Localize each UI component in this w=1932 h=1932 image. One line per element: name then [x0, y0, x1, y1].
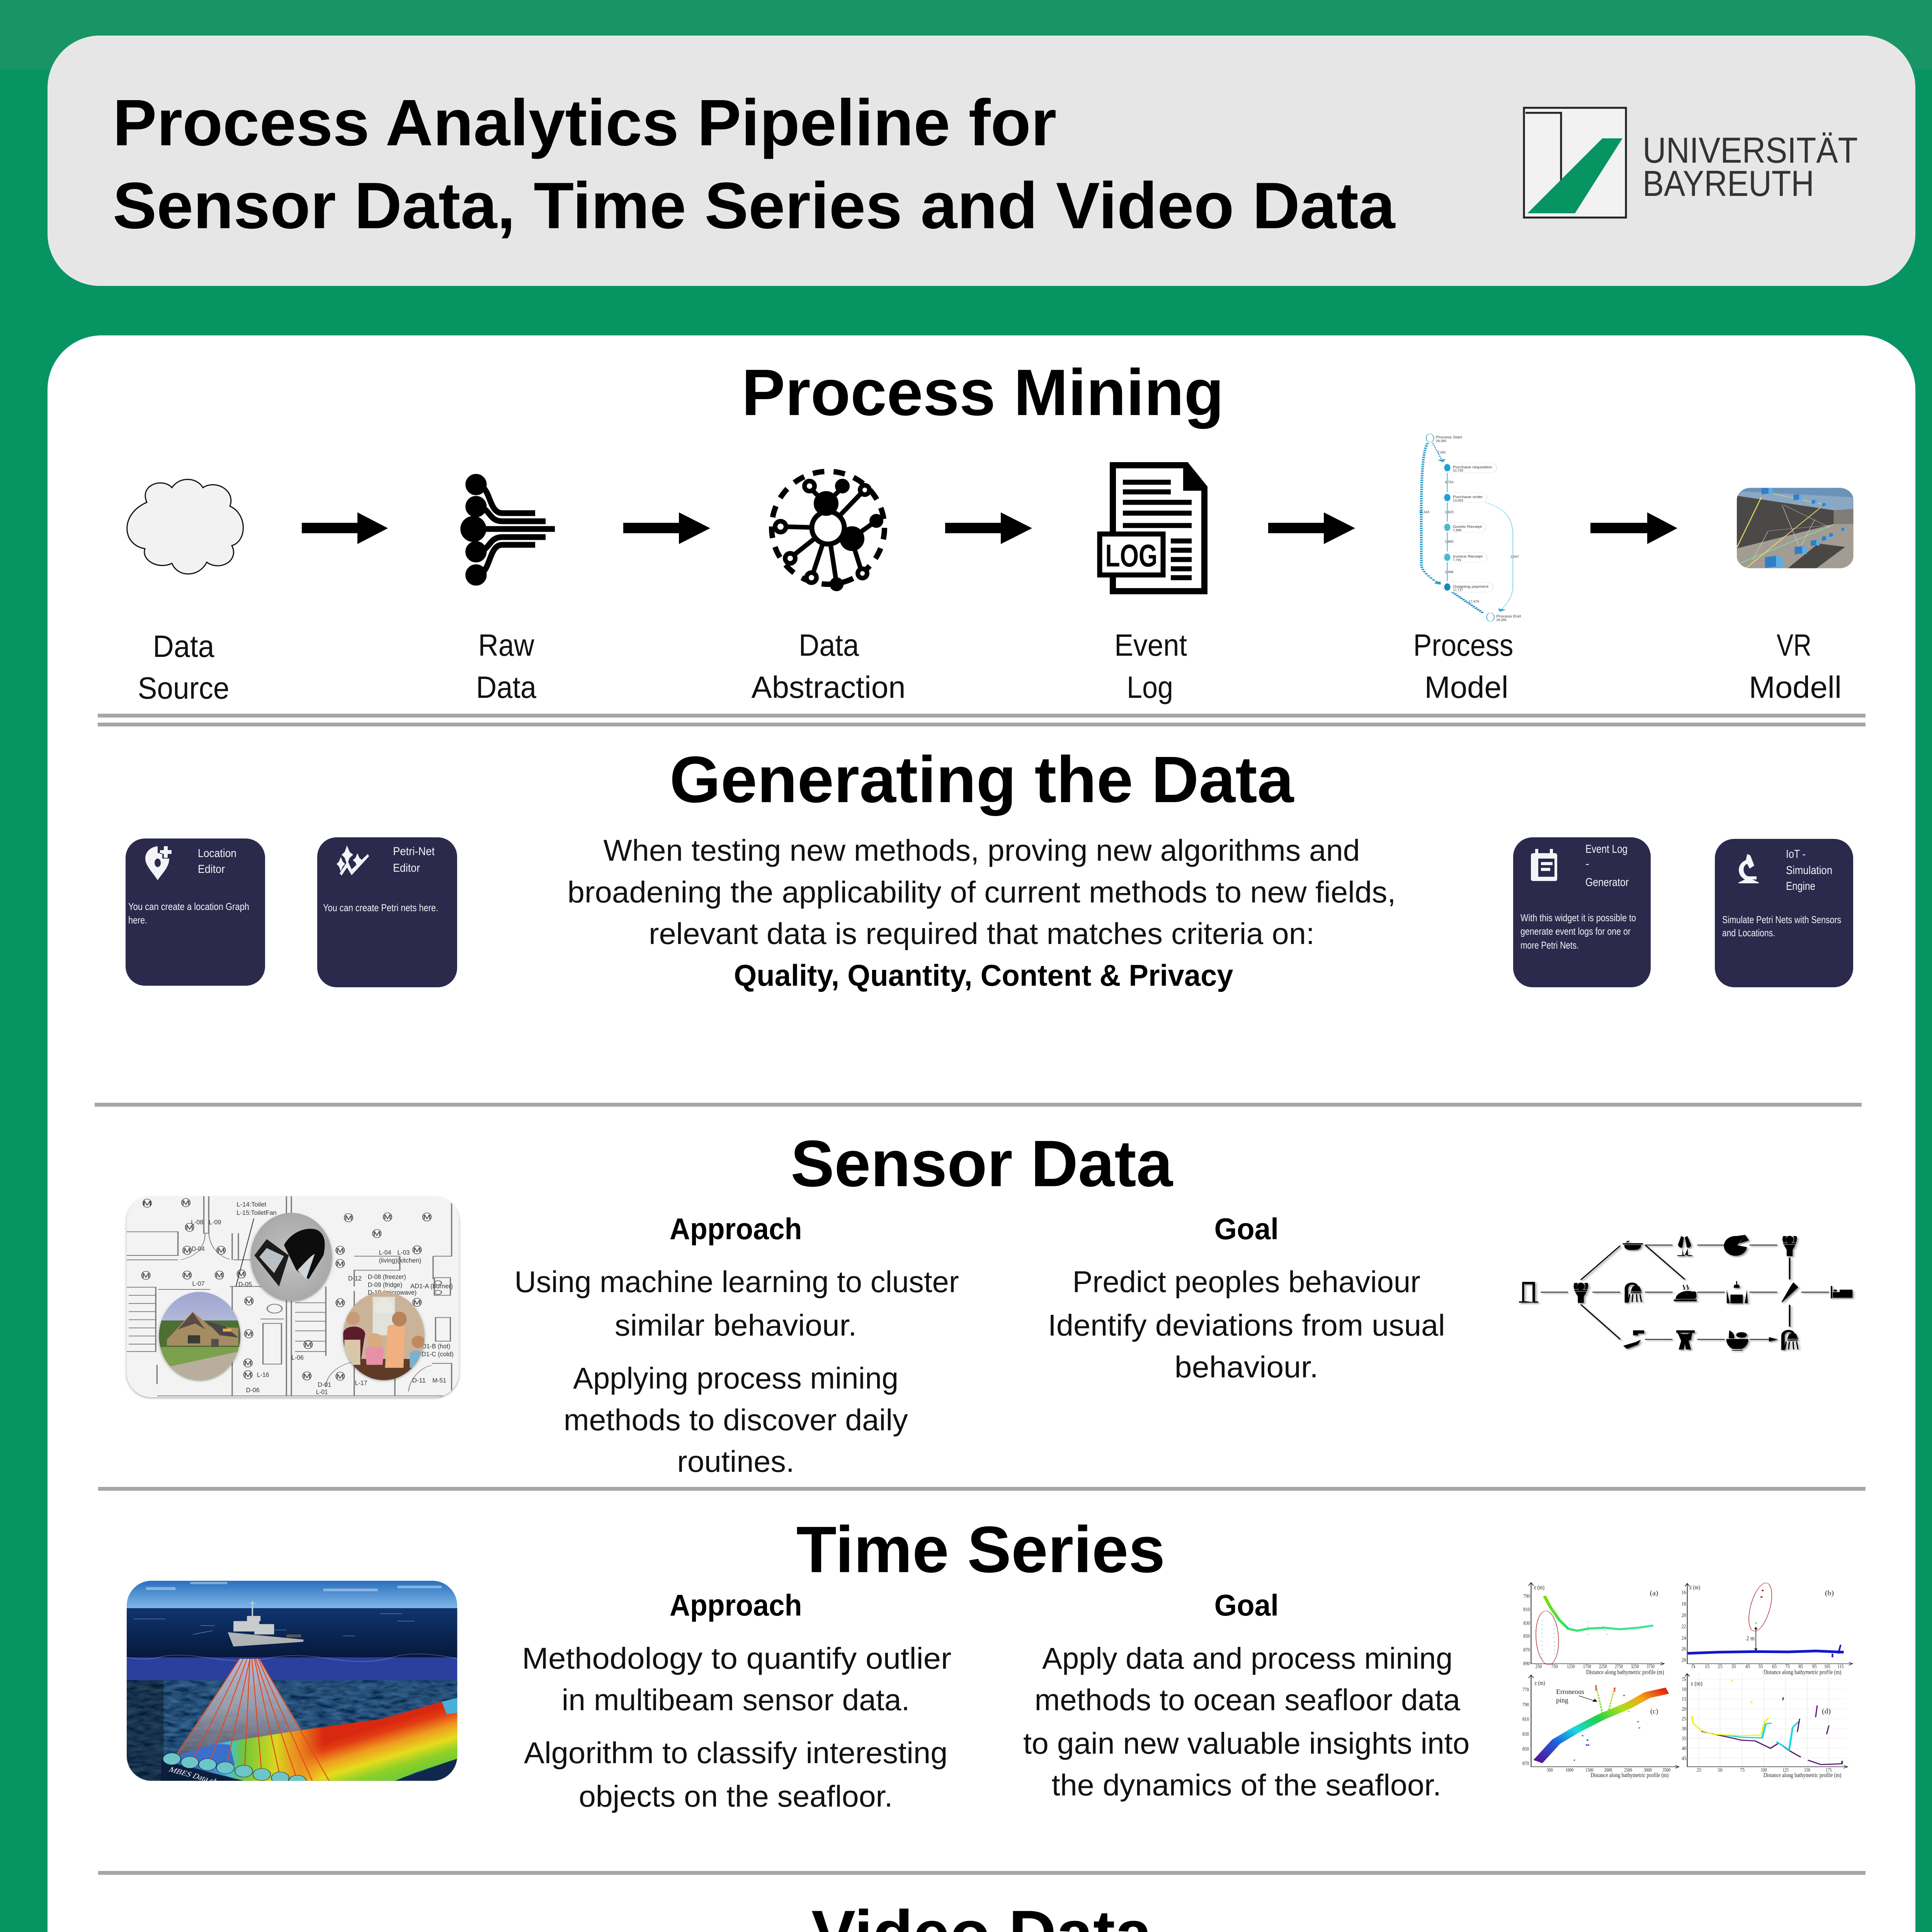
process model diagram: Purchase order: [1453, 495, 1483, 499]
process model diagram: 7,791: [1453, 558, 1461, 562]
chart (a): 810: [1523, 1606, 1530, 1612]
image: smart home floor plan: M: [413, 1299, 421, 1306]
process model diagram: 7,999: [1453, 529, 1461, 532]
inset photo: family: [343, 1292, 425, 1381]
image: smart home floor plan: AD1-A (burner): [410, 1282, 453, 1290]
image: smart home floor plan: M: [413, 1247, 421, 1253]
heading: Generating the Data: Generating the Data: [670, 743, 1294, 816]
card: Petri-Net Editor: Editor: [393, 862, 420, 874]
image: smart home floor plan: D-12: [348, 1275, 362, 1282]
card: Location Editor: You can create a location Graph: [128, 901, 249, 912]
VR model image: [1737, 487, 1854, 568]
chart (a): 2250: [1599, 1663, 1607, 1669]
text: sensor data goal: [1048, 1212, 1445, 1384]
diagram: daily routine flow: [1519, 1235, 1852, 1351]
image: smart home floor plan: M: [182, 1199, 190, 1206]
process model diagram: 1,468: [1445, 570, 1454, 574]
title: Sensor Data, Time Series and Video Data: [113, 168, 1396, 242]
text: time series goal: Apply data and process mining: [1042, 1641, 1452, 1675]
process model diagram: 29,395: [1496, 618, 1507, 622]
chart (b): 115: [1838, 1663, 1844, 1669]
chart (a): 1250: [1567, 1663, 1575, 1669]
panel: main content: [48, 335, 1915, 1932]
image: smart home floor plan: [127, 1196, 459, 1397]
image: smart home floor plan: L-07: [192, 1280, 204, 1287]
card: IoT Simulation Engine: Engine: [1786, 880, 1815, 893]
chart (c): 1000: [1565, 1767, 1573, 1773]
image: smart home floor plan: L-06: [291, 1354, 304, 1361]
text: sensor data approach: methods to discover daily: [564, 1403, 908, 1437]
text: time series approach: in multibeam sensor data.: [562, 1683, 910, 1717]
image: smart home floor plan: M: [345, 1214, 352, 1221]
process step labels: Modell: [1749, 670, 1842, 704]
icon: university logo: UNIVERSITÄT: [1643, 130, 1858, 170]
chart (b): 105: [1824, 1663, 1830, 1669]
inset photo: motion sensor: [251, 1213, 332, 1301]
card: IoT Simulation Engine: Simulate Petri Nets with Sensors: [1722, 914, 1841, 925]
arrow: [1268, 512, 1355, 544]
chart (d): 10: [1682, 1686, 1686, 1692]
text: time series goal: the dynamics of the seafloor.: [1052, 1768, 1441, 1802]
text: generating the data description: Quality, Quantity, Content & Privacy: [734, 958, 1233, 992]
text: time series approach: Methodology to quantify outlier: [522, 1641, 951, 1675]
process step labels: Data: [476, 670, 536, 704]
process model diagram: 13,059: [1453, 499, 1463, 502]
chart (c): 2500: [1624, 1767, 1632, 1773]
image: smart home floor plan: D-04: [192, 1245, 205, 1252]
title: [113, 86, 1396, 242]
image: smart home floor plan: M: [245, 1298, 253, 1304]
process model diagram: 2,007: [1510, 555, 1519, 558]
process step labels: Data: [799, 628, 859, 662]
chart (d): z (m): [1691, 1680, 1702, 1687]
chart (b): 65: [1772, 1663, 1777, 1669]
process model diagram: 1,893: [1445, 540, 1454, 543]
chart (b): 5: [1691, 1663, 1696, 1669]
icon: microscope: [1738, 854, 1759, 883]
card: Event Log Generator: -: [1585, 857, 1589, 870]
chart (d): 5: [1682, 1676, 1686, 1682]
image: smart home floor plan: M: [142, 1272, 150, 1279]
process model diagram: 7,691: [1438, 451, 1446, 454]
card: IoT Simulation Engine: [1715, 839, 1853, 987]
chart (d): (d): [1822, 1708, 1831, 1715]
chart (c): 2000: [1604, 1767, 1612, 1773]
chart (a): z (m): [1534, 1584, 1544, 1591]
card: Event Log Generator: [1513, 837, 1651, 987]
chart (d): 40: [1682, 1745, 1686, 1751]
text: generating the data description: [567, 833, 1396, 992]
card: Event Log Generator: more Petri Nets.: [1520, 939, 1579, 951]
chart (b): 35: [1731, 1663, 1736, 1669]
process step labels: Log: [1127, 670, 1173, 704]
text: sensor data goal: behaviour.: [1175, 1350, 1318, 1384]
chart (a): 790: [1523, 1593, 1530, 1599]
icon: calendar: [1531, 849, 1557, 881]
chart (b): 2 m: [1746, 1635, 1755, 1642]
image: smart home floor plan: D1-C (cold): [422, 1350, 454, 1358]
chart (c): 830: [1522, 1731, 1529, 1737]
text: time series goal: methods to ocean seafloor data: [1035, 1683, 1460, 1717]
text: sensor data approach: routines.: [677, 1444, 794, 1478]
icon: event log document: LOG: [1105, 538, 1158, 573]
process step labels: [138, 628, 1842, 705]
image: smart home floor plan: M: [304, 1341, 312, 1348]
text: sensor data approach: Approach: [670, 1212, 802, 1246]
image: smart home floor plan: L-01: [316, 1388, 328, 1396]
heading: Time Series: Time Series: [796, 1513, 1165, 1586]
chart (c): 3500: [1662, 1767, 1670, 1773]
heading: Sensor Data: Sensor Data: [791, 1127, 1173, 1200]
image: smart home floor plan: M: [337, 1247, 344, 1254]
image: smart home floor plan: M-51: [432, 1377, 446, 1384]
chart (c): 790: [1522, 1702, 1529, 1708]
image: smart home floor plan: M: [216, 1272, 223, 1279]
image: smart home floor plan: M: [337, 1373, 344, 1380]
chart (c): Erroneous: [1556, 1688, 1584, 1696]
chart (d): 25: [1697, 1767, 1701, 1773]
card: Event Log Generator: With this widget it is possible to: [1520, 912, 1636, 923]
chart (a): 890: [1523, 1660, 1530, 1666]
chart (b): 22: [1681, 1623, 1686, 1629]
title: Process Analytics Pipeline for: [113, 86, 1056, 159]
chart (d): 150: [1804, 1767, 1810, 1773]
chart (b): Distance along bathymetric profile (m): [1764, 1669, 1841, 1675]
chart (b): 24: [1681, 1635, 1686, 1641]
icon: data source cloud: [127, 480, 243, 574]
chart (b): 55: [1758, 1663, 1763, 1669]
process step labels: Event: [1114, 628, 1187, 662]
card: Location Editor: Location: [198, 847, 236, 860]
image: smart home floor plan: M: [373, 1230, 381, 1237]
chart (b): 15: [1705, 1663, 1709, 1669]
chart (c): (c): [1650, 1708, 1658, 1715]
process step labels: Source: [138, 671, 230, 705]
text: sensor data approach: [514, 1212, 959, 1478]
card: IoT Simulation Engine: and Locations.: [1722, 927, 1775, 939]
chart (c): ping: [1556, 1697, 1568, 1704]
chart (d): 175: [1826, 1767, 1832, 1773]
chart: bathymetric profiles: [1522, 1582, 1852, 1779]
text: time series goal: Goal: [1214, 1588, 1279, 1622]
chart (b): z (m): [1690, 1584, 1700, 1591]
ship: [228, 1632, 304, 1646]
process model diagram: Invoice Receipt: [1453, 554, 1483, 558]
chart (c): z (m): [1535, 1680, 1545, 1687]
chart (d): 125: [1782, 1767, 1789, 1773]
image: smart home floor plan: M: [245, 1330, 252, 1337]
image: smart home floor plan: M: [244, 1359, 252, 1367]
image: smart home floor plan: M: [303, 1372, 311, 1379]
chart (b): 16: [1681, 1589, 1686, 1595]
chart (a): 250: [1535, 1663, 1542, 1669]
chart (c): 3000: [1644, 1767, 1652, 1773]
icon: event log document: [1100, 465, 1204, 591]
text: time series goal: to gain new valuable insights into: [1023, 1726, 1469, 1760]
process model diagram: Process Start: [1436, 435, 1462, 439]
chart (c): [1522, 1675, 1679, 1779]
chart (c): 500: [1547, 1767, 1553, 1773]
chart (b): [1681, 1582, 1852, 1675]
image: smart home floor plan: D-01: [318, 1381, 331, 1388]
process model diagram: 10,728: [1453, 469, 1463, 472]
text: time series goal: [1023, 1588, 1469, 1802]
chart (d): [1682, 1673, 1848, 1779]
card: Location Editor: here.: [128, 914, 147, 926]
text: sensor data goal: Predict peoples behaviour: [1072, 1265, 1420, 1299]
text: time series approach: [522, 1588, 951, 1813]
chart (b): 95: [1812, 1663, 1817, 1669]
chart (a): 830: [1523, 1620, 1530, 1626]
text: generating the data description: When testing new methods, proving new algorithms and: [604, 833, 1360, 867]
chart (a): 1750: [1583, 1663, 1591, 1669]
image: smart home floor plan: M: [184, 1272, 191, 1279]
image: smart home floor plan: L-08: [191, 1218, 203, 1226]
chart (b): 45: [1745, 1663, 1750, 1669]
icon: university logo: BAYREUTH: [1643, 163, 1814, 204]
chart (a): 3750: [1646, 1663, 1655, 1669]
image: smart home floor plan: M: [384, 1214, 391, 1221]
image: smart home floor plan: (living)(kitchen): [379, 1257, 421, 1264]
text: time series approach: Approach: [670, 1588, 802, 1622]
text: generating the data description: broadening the applicability of current methods to new fields,: [567, 875, 1396, 909]
chart (d): 15: [1682, 1696, 1686, 1702]
chart (b): 26: [1681, 1646, 1686, 1652]
image: multibeam sonar ship: [127, 1581, 457, 1791]
image: smart home floor plan: M: [186, 1224, 193, 1231]
process step labels: VR: [1777, 628, 1811, 662]
image: smart home floor plan: L-16: [257, 1371, 269, 1378]
chart (d): Distance along bathymetric profile (m): [1764, 1772, 1841, 1779]
text: sensor data approach: similar behaviour.: [615, 1308, 857, 1342]
process step labels: Abstraction: [751, 670, 906, 704]
arrow: [623, 512, 710, 544]
card: Event Log Generator: Generator: [1585, 876, 1629, 889]
chart (d): 100: [1761, 1767, 1767, 1773]
process model diagram: [1419, 434, 1521, 622]
image: smart home floor plan: M: [423, 1214, 430, 1221]
process step labels: Raw: [478, 628, 534, 662]
image: smart home floor plan: L-17: [355, 1379, 367, 1386]
chart (a): 850: [1523, 1633, 1530, 1639]
arrow: [945, 512, 1032, 544]
chart (d): 50: [1718, 1767, 1723, 1773]
process step labels: Process: [1413, 628, 1513, 662]
image: smart home floor plan: L-14:Toilet: [236, 1201, 266, 1208]
text: time series approach: objects on the seafloor.: [579, 1779, 893, 1813]
card: Petri-Net Editor: Petri-Net: [393, 845, 435, 858]
chart (d): 25: [1682, 1716, 1686, 1722]
text: sensor data goal: Goal: [1214, 1212, 1279, 1246]
chart (a): (a): [1650, 1589, 1658, 1597]
process model diagram: Purchase requisition: [1453, 465, 1492, 469]
chart (b): 75: [1785, 1663, 1790, 1669]
chart (b): 25: [1718, 1663, 1723, 1669]
image: smart home floor plan: D-11: [412, 1377, 426, 1384]
panel: header: [48, 36, 1915, 286]
image: multibeam sonar ship: MBES Data showing: [167, 1765, 240, 1791]
icon: data abstraction: [772, 471, 884, 589]
image: smart home floor plan: L-04: [379, 1249, 391, 1256]
card: IoT Simulation Engine: Simulation: [1786, 864, 1832, 877]
chart (d): 35: [1682, 1735, 1686, 1742]
arrow: [1590, 512, 1677, 544]
chart (b): 18: [1681, 1601, 1686, 1607]
card: Location Editor: [126, 838, 265, 986]
chart (b): 20: [1681, 1612, 1686, 1618]
text: sensor data approach: Using machine learning to cluster: [514, 1265, 959, 1299]
process step labels: Model: [1424, 670, 1509, 704]
card: Petri-Net Editor: [317, 837, 457, 987]
image: smart home floor plan: D-10 (microwave): [368, 1289, 417, 1296]
process model diagram: 1,923: [1445, 510, 1454, 514]
text: sensor data goal: Identify deviations from usual: [1048, 1308, 1445, 1342]
chart (d): 20: [1682, 1706, 1686, 1712]
card: IoT Simulation Engine: IoT -: [1786, 848, 1806, 861]
inset photo: house: [158, 1292, 242, 1381]
process model diagram: 15,543: [1419, 510, 1429, 514]
chart (a): 3250: [1631, 1663, 1639, 1669]
process model diagram: 17,679: [1469, 600, 1479, 603]
arrow: [302, 512, 388, 544]
chart (d): 75: [1740, 1767, 1745, 1773]
process model diagram: Goods Receipt: [1453, 524, 1482, 529]
chart (c): Distance along bathymetric profile (m): [1590, 1772, 1668, 1779]
process model diagram: Outgoing payment: [1453, 584, 1488, 588]
card: Event Log Generator: generate event logs for one or: [1520, 925, 1631, 937]
image: smart home floor plan: M: [184, 1247, 191, 1254]
icon: location pin: [145, 846, 172, 880]
chart (b): 28: [1681, 1657, 1686, 1663]
process step labels: Data: [153, 629, 214, 663]
image: smart home floor plan: L-09: [209, 1218, 221, 1226]
image: smart home floor plan: M: [337, 1299, 344, 1306]
image: smart home floor plan: D-06: [246, 1386, 260, 1394]
chart (a): 2750: [1615, 1663, 1623, 1669]
image: smart home floor plan: D-05: [238, 1281, 252, 1288]
icons row: [1519, 1235, 1852, 1351]
process model diagram: 29,395: [1436, 439, 1446, 443]
process model diagram: Process End: [1496, 614, 1521, 618]
image: smart home floor plan: D-09 (fridge): [368, 1281, 402, 1288]
chart (d): 45: [1682, 1755, 1686, 1761]
chart (c): 770: [1522, 1687, 1529, 1692]
card: Event Log Generator: Event Log: [1585, 843, 1628, 855]
icon: university logo: [1524, 108, 1858, 218]
card: Petri-Net Editor: You can create Petri nets here.: [323, 902, 438, 913]
image: smart home floor plan: M: [218, 1247, 225, 1254]
chart (a): Distance along bathymetric profile (m): [1586, 1669, 1664, 1675]
text: sensor data approach: Applying process mining: [573, 1361, 898, 1395]
chart (c): 1500: [1585, 1767, 1594, 1773]
chart (d): 30: [1682, 1726, 1686, 1731]
icon: raw data: [463, 477, 555, 583]
heading: Process Mining: Process Mining: [742, 355, 1224, 429]
chart (c): 870: [1522, 1760, 1529, 1766]
image: smart home floor plan: D1-B (hot): [422, 1342, 451, 1350]
image: smart home floor plan: D-08 (freezer): [368, 1273, 406, 1281]
chart (c): 810: [1522, 1716, 1529, 1722]
chart (a): 870: [1523, 1647, 1530, 1653]
chart (a): 750: [1551, 1663, 1558, 1669]
image: smart home floor plan: M: [238, 1270, 245, 1277]
chart (a): [1523, 1583, 1664, 1675]
chart (b): 85: [1798, 1663, 1803, 1669]
chart (c): 850: [1522, 1746, 1529, 1752]
process model diagram: 17,717: [1453, 588, 1463, 592]
image: smart home floor plan: M: [244, 1371, 252, 1378]
image: smart home floor plan: M: [337, 1260, 344, 1267]
chart (b): (b): [1825, 1589, 1834, 1597]
card: Location Editor: Editor: [198, 863, 225, 876]
icon: sparkle chart: [337, 845, 369, 876]
image: smart home floor plan: L-15:ToiletFan: [236, 1209, 277, 1216]
text: generating the data description: relevant data is required that matches criteria on:: [649, 917, 1315, 951]
process model diagram: 6,754: [1445, 481, 1454, 484]
image: smart home floor plan: M: [143, 1200, 151, 1207]
image: smart home floor plan: L-03: [397, 1249, 410, 1256]
text: time series approach: Algorithm to classify interesting: [524, 1736, 947, 1770]
